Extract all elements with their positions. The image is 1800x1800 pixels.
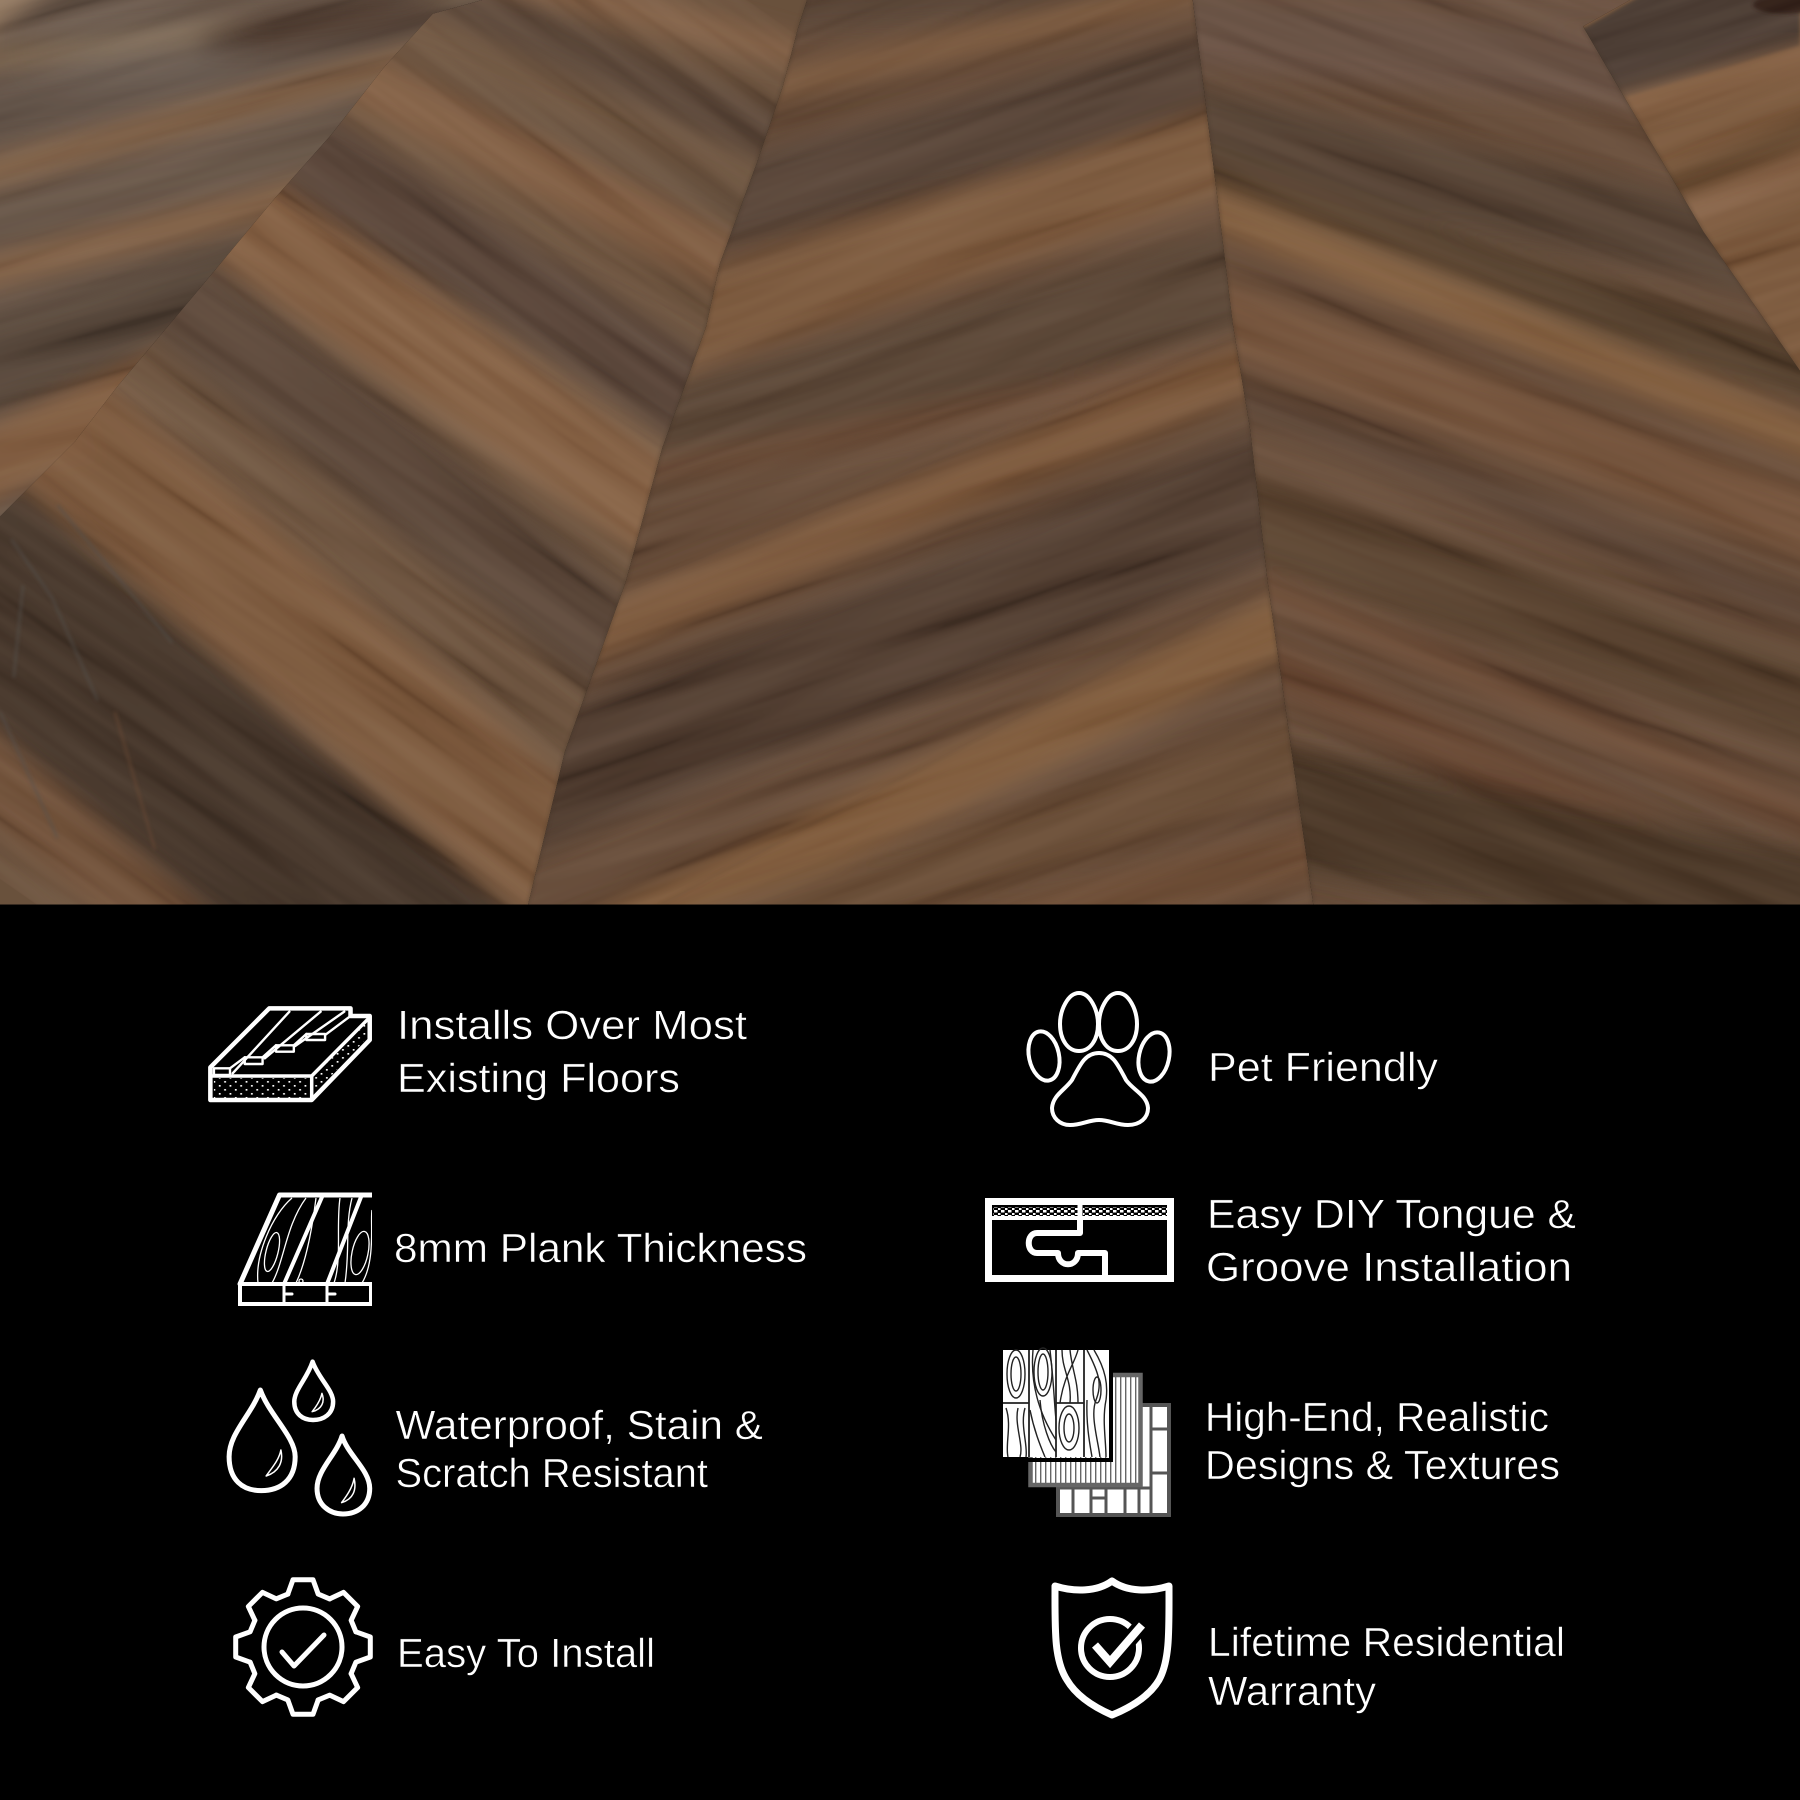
icon: tongue and groove joint [988, 1200, 1170, 1278]
text: high-end realistic designs and textures: High-End, Realistic [1205, 1394, 1549, 1440]
text: high-end realistic designs and textures [1205, 1394, 1560, 1488]
feature: installs over most existing floors [210, 1002, 748, 1101]
feature: 8mm plank thickness [240, 1195, 807, 1304]
feature: waterproof, stain and scratch resistant [229, 1362, 763, 1514]
icon: water drops [229, 1362, 370, 1514]
floor column: right chevron planks [1192, 0, 1800, 904]
feature: easy DIY tongue and groove installation [988, 1191, 1576, 1290]
floor column: far right planks [1583, 0, 1800, 370]
icon: gear with check mark [236, 1580, 370, 1714]
floor column: far left planks [0, 0, 482, 516]
icon: wood plank [240, 1195, 373, 1304]
text: pet friendly: Pet Friendly [1208, 1044, 1439, 1090]
floor column: centre chevron planks [528, 0, 1313, 904]
swatch: wood grain [1003, 1348, 1111, 1460]
text: easy DIY tongue and groove installation: Easy DIY Tongue & [1207, 1191, 1576, 1237]
feature: pet friendly [1024, 993, 1439, 1125]
text: waterproof, stain and scratch resistant [396, 1402, 763, 1496]
text: high-end realistic designs and textures: Designs & Textures [1205, 1442, 1560, 1488]
feature: lifetime residential warranty [1055, 1581, 1565, 1715]
text: lifetime residential warranty [1208, 1619, 1565, 1714]
text: easy to install: Easy To Install [397, 1630, 655, 1676]
photo: chevron wood floor [0, 0, 1800, 905]
text: waterproof, stain and scratch resistant: Scratch Resistant [396, 1450, 709, 1496]
swatch: tile pattern [1058, 1405, 1169, 1515]
text: waterproof, stain and scratch resistant: Waterproof, Stain & [396, 1402, 763, 1448]
text: installs over most existing floors: Existing Floors [397, 1055, 680, 1101]
icon: layered floor block [210, 1008, 370, 1100]
swatch: striped wood [1030, 1375, 1140, 1485]
text: easy DIY tongue and groove installation: Groove Installation [1206, 1244, 1572, 1290]
icon: paw print [1024, 993, 1174, 1125]
icon: stacked texture swatches [1003, 1348, 1169, 1515]
feature: easy to install [236, 1580, 655, 1714]
text: 8mm plank thickness: 8mm Plank Thickness [394, 1225, 807, 1271]
icon: shield with check mark [1055, 1581, 1169, 1715]
text: easy DIY tongue and groove installation [1206, 1191, 1576, 1290]
text: installs over most existing floors: Installs Over Most [397, 1002, 748, 1048]
feature: high-end realistic designs and textures [1003, 1348, 1560, 1515]
text: installs over most existing floors [397, 1002, 748, 1101]
text: lifetime residential warranty: Lifetime Residential [1208, 1619, 1565, 1665]
floor column: left chevron planks [0, 0, 807, 904]
text: lifetime residential warranty: Warranty [1208, 1668, 1377, 1714]
